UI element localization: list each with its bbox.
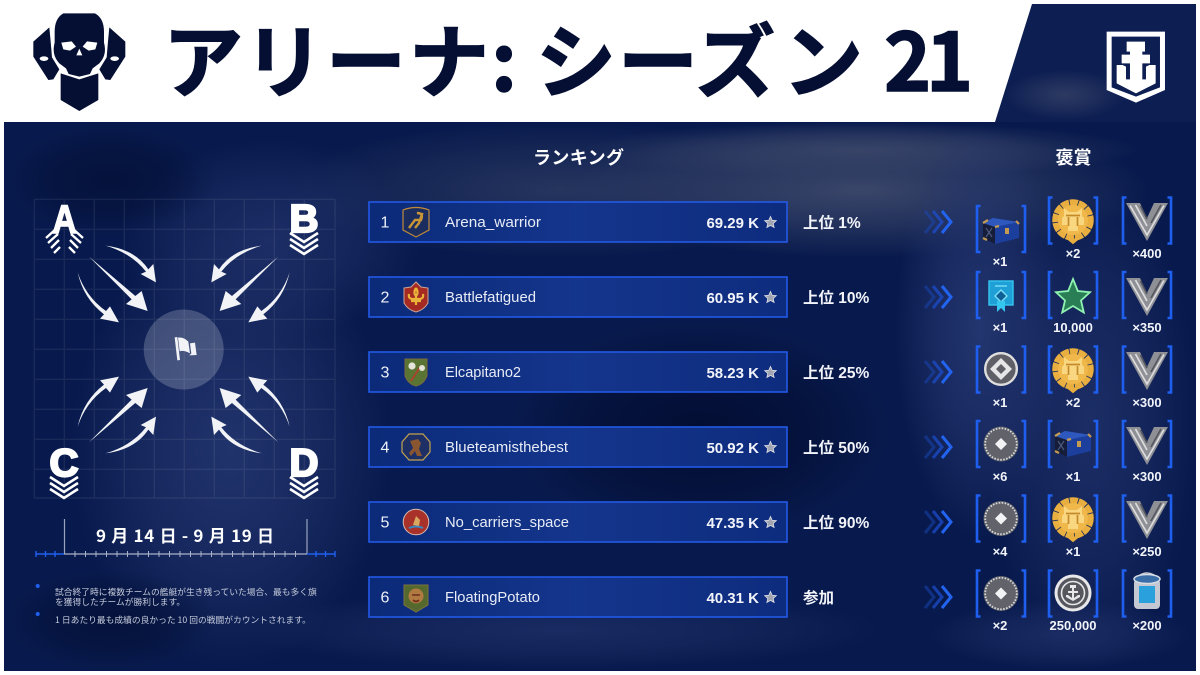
rank row 5: 47.35 K — [706, 515, 759, 532]
team D badge: D — [290, 442, 318, 485]
team A badge — [46, 198, 83, 253]
clan emblem — [404, 585, 428, 612]
icon: certificate — [989, 281, 1013, 312]
rank row 2: 上位 10% — [803, 289, 870, 307]
icon: green star — [1056, 279, 1090, 312]
rewards row 1 — [977, 198, 1171, 269]
rank row 3: 3 — [381, 364, 390, 382]
panel: top right logo panel — [995, 4, 1196, 122]
attack arrows — [78, 246, 290, 453]
notes: 試合終了時に複数チームの艦艇が生き残っていた場合、最も多く旗 — [55, 585, 317, 598]
rank row 2: Battlefatigued — [445, 290, 536, 306]
rewards row 4: ×1 — [1066, 469, 1080, 484]
arrows to rewards — [925, 211, 951, 608]
rank row 3 — [369, 352, 870, 392]
clan emblem — [405, 359, 427, 386]
rank row 2 — [369, 277, 870, 317]
rank row 1: 1 — [381, 214, 390, 232]
rewards row 1: ×2 — [1066, 246, 1080, 261]
rank row 4: 50.92 K — [706, 440, 759, 457]
rank row 1: 69.29 K — [706, 215, 759, 232]
heading: ranking: ランキング — [533, 144, 624, 170]
clan emblem — [404, 282, 428, 312]
rank row 3: 上位 25% — [803, 364, 870, 382]
rank row 1: 上位 1% — [803, 214, 861, 232]
rewards row 2: ×350 — [1132, 320, 1162, 335]
rank row 6: 40.31 K — [706, 590, 759, 607]
rewards row 2 — [977, 272, 1171, 335]
rewards row 6 — [977, 570, 1171, 633]
team A badge: A — [52, 198, 76, 242]
date timeline — [36, 519, 335, 557]
rewards row 4: ×300 — [1132, 469, 1162, 484]
rewards row 3: ×1 — [993, 395, 1007, 410]
rank row 6 — [369, 577, 834, 617]
rank row 5: 5 — [381, 514, 390, 532]
panel: battle map — [34, 198, 335, 498]
rewards row 3: ×2 — [1066, 395, 1080, 410]
rewards row 1: ×400 — [1132, 246, 1162, 261]
rank row 3: Elcapitano2 — [445, 365, 521, 381]
clan emblem — [402, 434, 430, 460]
rank row 6: FloatingPotato — [445, 590, 540, 606]
rank row 1 — [369, 202, 861, 242]
team C badge: C — [50, 442, 78, 485]
rewards row 2: ×1 — [993, 320, 1007, 335]
capture zone circle — [144, 310, 224, 390]
rank row 5: No_carriers_space — [445, 515, 569, 531]
icon: paint bucket — [1134, 573, 1160, 609]
rewards row 6: 250,000 — [1050, 618, 1096, 633]
rank row 5 — [369, 502, 870, 542]
heading: rewards: 褒賞 — [1056, 144, 1092, 170]
rewards row 5: ×4 — [993, 544, 1008, 559]
rewards row 3: ×300 — [1132, 395, 1162, 410]
rewards row 2: 10,000 — [1053, 320, 1093, 335]
icon: skull emblem — [33, 13, 125, 111]
icon: silver token — [984, 352, 1018, 386]
rewards row 4 — [977, 421, 1171, 484]
rank row 5: 上位 90% — [803, 514, 870, 532]
rank row 4: 上位 50% — [803, 439, 870, 457]
team B badge: B — [290, 198, 318, 241]
rewards row 1: ×1 — [993, 254, 1007, 269]
rewards row 3 — [977, 346, 1171, 410]
rank row 2: 2 — [381, 290, 390, 306]
rank row 3: 58.23 K — [706, 365, 759, 382]
rank row 6: 参加 — [803, 589, 834, 607]
rewards row 5: ×1 — [1066, 544, 1080, 559]
rewards row 5 — [977, 496, 1171, 559]
rank row 6: 6 — [381, 590, 390, 606]
rewards row 5: ×250 — [1132, 544, 1162, 559]
rank row 4 — [369, 427, 870, 467]
notes: を獲得したチームが勝利します。 — [55, 595, 185, 608]
icon: game logo shield — [1107, 32, 1165, 103]
icon: credits coin — [1054, 574, 1092, 612]
clan emblem — [403, 208, 429, 237]
notes: 1 日あたり最も成績の良かった 10 回の戦闘がカウントされます。 — [55, 613, 311, 626]
rewards row 4: ×6 — [993, 469, 1007, 484]
rank row 1: Arena_warrior — [445, 215, 541, 231]
rewards row 6: ×2 — [993, 618, 1007, 633]
rank row 4: 4 — [381, 440, 390, 456]
rank row 4: Blueteamisthebest — [445, 440, 568, 456]
title: アリーナ:シーズン21 — [163, 0, 973, 115]
notes — [36, 584, 317, 626]
map grid — [34, 199, 335, 498]
rank row 2: 60.95 K — [706, 290, 759, 307]
date range: 9 月 14 日 - 9 月 19 日 — [96, 522, 274, 547]
icon: flag — [175, 337, 197, 360]
clan emblem — [403, 509, 429, 535]
rewards row 6: ×200 — [1132, 618, 1162, 633]
